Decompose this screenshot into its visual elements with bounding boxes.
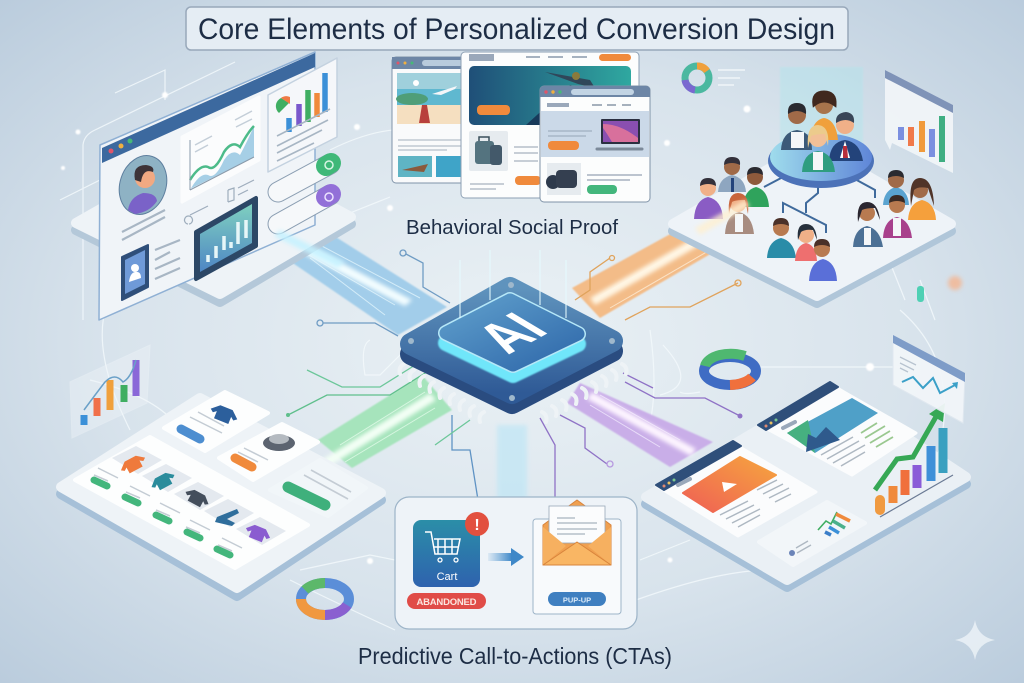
title: Core Elements of Personalized Conversion Design [198,13,835,46]
browser window [99,52,315,320]
offer card [270,460,366,516]
window center [461,52,639,198]
abandoned tag [407,593,486,609]
alert badge [465,512,489,536]
donut icon [685,66,745,90]
circuit traces [286,250,742,500]
glow column [780,67,863,155]
product card: jacket [164,392,268,451]
popup card: PUP-UP [563,596,591,604]
trend card [893,335,965,423]
lead team [781,92,863,172]
chip pins [400,364,626,422]
data beam: blue [262,212,447,335]
line chart card [182,97,259,202]
chart card [885,70,953,173]
label: behavioral social proof: Behavioral Social Proof [406,216,618,239]
small chart [70,345,150,438]
platform [673,144,951,303]
abandoned tag: ABANDONED [416,597,477,608]
shirts [118,452,272,545]
beam streak on platform [274,230,345,268]
connector lines [764,177,875,233]
platform [61,398,381,596]
beam streak on platform [695,200,750,235]
ambient glows [917,276,962,302]
group middle [767,218,837,281]
panel: product recommendations [61,345,381,596]
growth bars [875,403,953,517]
label: predictive CTAs: Predictive Call-to-Actions (CTAs) [358,643,672,669]
panel: audience segments [673,66,953,303]
popup card [533,519,621,614]
cart tile: Cart [437,571,457,583]
chip label: AI [461,304,561,362]
chip body [411,288,612,403]
data beam: purple [567,383,713,467]
panel: web variations [392,52,650,202]
disc [768,133,874,188]
data beam: orange [572,215,738,318]
data beam: down to CTA [497,425,527,500]
window B: landscape [758,382,916,475]
tablet [196,198,256,279]
platform [76,144,351,302]
cart tile [413,520,480,587]
small icons [184,180,254,224]
panel: predictive CTAs [395,497,637,629]
chip: AI core [400,250,626,422]
profile text lines [122,210,180,279]
phone [122,245,148,300]
alert badge: ! [474,517,480,534]
window right [540,86,650,202]
buy buttons [94,480,230,555]
panel: adaptive content [646,335,966,587]
product list card [75,437,308,568]
avatar [112,149,174,221]
network lines [60,62,945,630]
window A: video [656,441,816,536]
bar chart card [268,58,337,172]
arrow [488,548,524,566]
platform [646,387,966,587]
panel: data profiles [76,52,351,320]
donut: center right [704,354,756,385]
data beam: green [318,375,452,468]
group left [694,157,769,234]
group right [853,170,936,247]
icon: sparkle [955,620,995,660]
envelope [543,500,611,565]
window left [392,57,482,183]
donut: bottom left [301,583,349,615]
glow nodes [61,92,874,564]
product card: bag [219,424,318,480]
analytics card [759,502,865,565]
search bars [278,161,333,224]
